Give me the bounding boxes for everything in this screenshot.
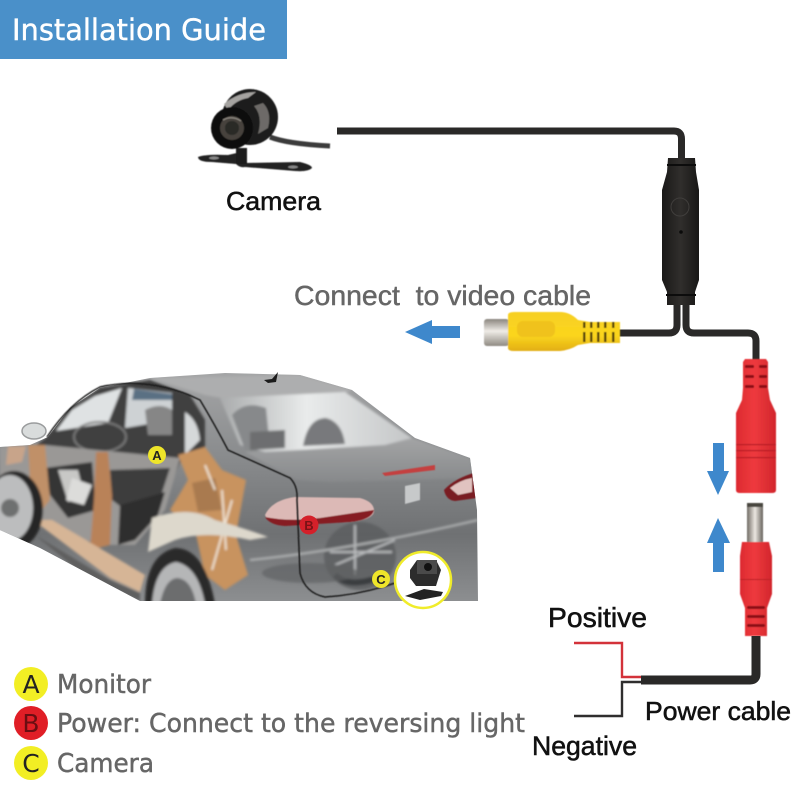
cabin interior: [36, 378, 206, 468]
legend item: monitor: Monitor: [57, 670, 151, 700]
roof antenna: [264, 372, 278, 383]
label: power cable: Power cable: [645, 696, 791, 726]
legend: [14, 667, 525, 780]
brake light: [382, 465, 435, 476]
rear windshield: [220, 392, 412, 452]
arrow: left to video: [405, 320, 460, 344]
wiring line: [47, 384, 395, 597]
arrow: down: [707, 443, 729, 495]
car cutaway illustration: [0, 370, 480, 608]
orange structure: b pillar: [90, 452, 112, 550]
badge C: C: [376, 572, 386, 587]
label: positive: Positive: [548, 602, 647, 633]
legend item: camera: Camera: [57, 749, 154, 779]
car body: [0, 370, 480, 605]
label: negative: Negative: [532, 731, 637, 761]
title banner: [0, 0, 287, 59]
label: connect to video cable: Connect to video cable: [294, 280, 591, 311]
icon: bullet camera: [198, 89, 330, 171]
orange structure: sill: [33, 520, 145, 592]
bumper shine: [250, 520, 478, 560]
rear wheel: [145, 548, 215, 604]
engine detail: [45, 462, 96, 518]
orange structure: rear quarter: [170, 447, 248, 590]
front wheel: [0, 471, 43, 549]
arrow: up: [707, 518, 730, 572]
power cable: [641, 636, 756, 680]
side mirror: [22, 423, 46, 439]
badge C: [372, 570, 390, 588]
left tail lamp: [265, 497, 374, 525]
transparent door panel: [0, 445, 180, 545]
label: camera: Camera: [226, 186, 322, 216]
badge B: B: [304, 518, 314, 533]
negative wire: [574, 682, 641, 716]
positive wire: [574, 643, 641, 677]
red female power connector: [736, 359, 776, 493]
inline control module: [662, 158, 699, 305]
badge A: A: [152, 448, 162, 463]
badge A: [148, 446, 166, 464]
badge: [405, 483, 420, 504]
roof panel: [150, 375, 352, 398]
camera cable: [337, 131, 682, 160]
right tail lamp: [444, 472, 477, 501]
trunk lid: [248, 438, 472, 478]
legend item: camera: C: [22, 749, 40, 778]
legend item: power: Power: Connect to the reversing light: [57, 709, 525, 739]
legend item: camera: [14, 746, 154, 780]
inset: square camera: [395, 552, 451, 608]
legend item: monitor: [14, 667, 151, 701]
red male power connector: [740, 503, 772, 636]
branch cables: [618, 305, 756, 362]
front side window: [56, 388, 122, 431]
title banner: Installation Guide: [12, 13, 266, 47]
steering wheel area: [74, 422, 126, 452]
yellow RCA connector: [484, 312, 620, 351]
rear suspension: [324, 522, 396, 590]
badge B: [300, 516, 318, 534]
rear door window: [125, 388, 172, 428]
legend item: monitor: A: [22, 670, 40, 699]
legend item: power: B: [22, 709, 40, 738]
orange structure: front pillar: [28, 445, 50, 515]
